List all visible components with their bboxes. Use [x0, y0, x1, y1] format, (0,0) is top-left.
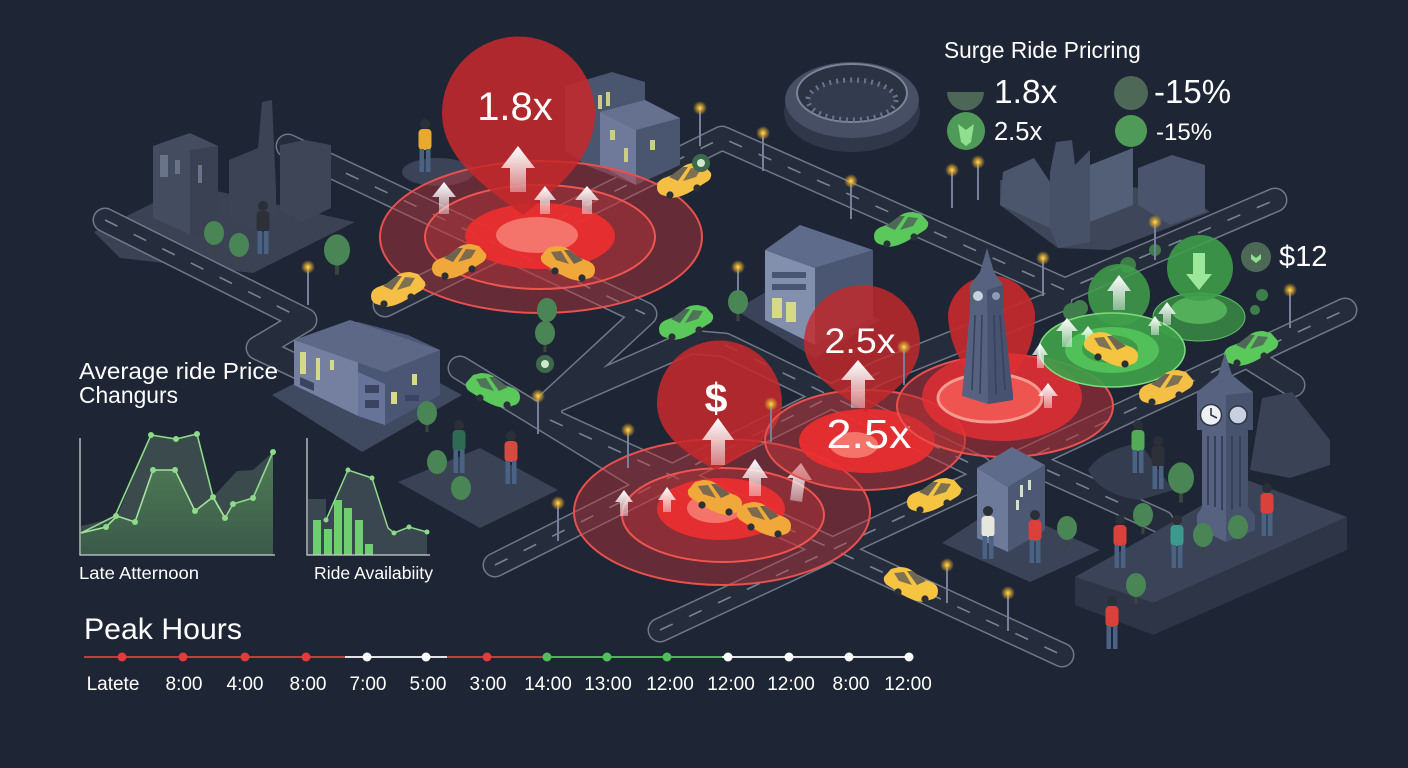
badge: 1.8x: 1.8x [477, 85, 553, 129]
timeline labels: 13:00 [584, 674, 632, 695]
badge: 1.8x [442, 37, 595, 215]
legend title: Surge Ride Pricring [944, 37, 1141, 63]
tree cluster [1063, 244, 1268, 321]
building: centre office [735, 225, 880, 358]
legend icon: 1.8x [947, 92, 984, 110]
timeline labels: 8:00 [166, 674, 202, 695]
timeline labels: 8:00 [833, 674, 869, 695]
heading: peak hours: Peak Hours [84, 613, 242, 646]
timeline labels: 12:00 [884, 674, 932, 695]
stadium [784, 62, 920, 152]
badge: 2.5x upper: 2.5x [824, 322, 896, 361]
legend icon: -15% green [1115, 115, 1147, 147]
legend icon: -15% grey [1114, 76, 1148, 110]
district: top right blocks [1000, 140, 1210, 250]
heading: average ride price [79, 358, 278, 408]
tower surge zone [897, 276, 1113, 457]
heading: average ride price: Average ride Price [79, 358, 278, 384]
platform: lower left people [398, 448, 558, 528]
timeline labels: 4:00 [227, 674, 263, 695]
label: ride availability: Ride Availabiity [314, 563, 433, 583]
timeline labels: 8:00 [290, 674, 326, 695]
badge: dollar: $ [705, 375, 728, 421]
legend icon: 2.5x [947, 112, 985, 150]
building: lower blue block [977, 447, 1045, 552]
arrow: up [841, 360, 875, 408]
arrow: down [1186, 253, 1212, 290]
timeline: peak hours [84, 652, 914, 662]
label: 2.5x lower: 2.5x [826, 411, 912, 457]
lower red surge zone [574, 341, 870, 585]
badge: 2.5x upper [804, 285, 920, 412]
legend value: -15% large: -15% [1154, 73, 1231, 110]
trees [204, 221, 748, 507]
platform: lower right plaza [942, 392, 1347, 635]
legend value: 1.8x: 1.8x [994, 74, 1058, 111]
district: top left dark blocks [153, 100, 331, 238]
cars [371, 163, 1278, 603]
arrows: up [432, 146, 599, 214]
building: bottom left apartments [272, 320, 462, 452]
timeline labels: 12:00 [646, 674, 694, 695]
legend value: -15% small: -15% [1156, 119, 1212, 146]
label: late afternoon: Late Atternoon [79, 563, 199, 583]
timeline labels: 14:00 [524, 674, 572, 695]
arrow: up [1107, 275, 1131, 310]
timeline labels: 7:00 [350, 674, 386, 695]
street lamps [301, 101, 1297, 631]
price callout: $12 [1241, 241, 1327, 273]
central clock tower [962, 248, 1013, 404]
district platform: top left [94, 185, 355, 273]
mid red surge zone [765, 285, 965, 490]
timeline labels: 3:00 [470, 674, 506, 695]
pin icons [536, 154, 710, 373]
upper red surge zone [380, 37, 702, 313]
legend: surge ride pricing [944, 37, 1231, 150]
heading: average ride price: Changurs [79, 382, 178, 408]
people [256, 119, 1274, 649]
arrows: up [615, 418, 812, 516]
line chart: late afternoon [80, 431, 276, 555]
timeline labels: 12:00 [767, 674, 815, 695]
price callout: $12: $12 [1279, 241, 1327, 273]
timeline labels: 12:00 [707, 674, 755, 695]
right clock tower [1197, 353, 1255, 542]
chart: ride availability [307, 438, 430, 555]
timeline labels [87, 674, 932, 695]
timeline labels: 5:00 [410, 674, 446, 695]
badge: dollar [657, 341, 782, 470]
city road network [105, 138, 1345, 655]
green discount zone [1032, 235, 1268, 408]
timeline labels: Latete [87, 674, 139, 695]
building: top centre block [565, 72, 680, 185]
platform: person on top road [402, 158, 474, 186]
legend value: 2.5x: 2.5x [994, 118, 1042, 146]
plaza trees [1057, 462, 1248, 604]
